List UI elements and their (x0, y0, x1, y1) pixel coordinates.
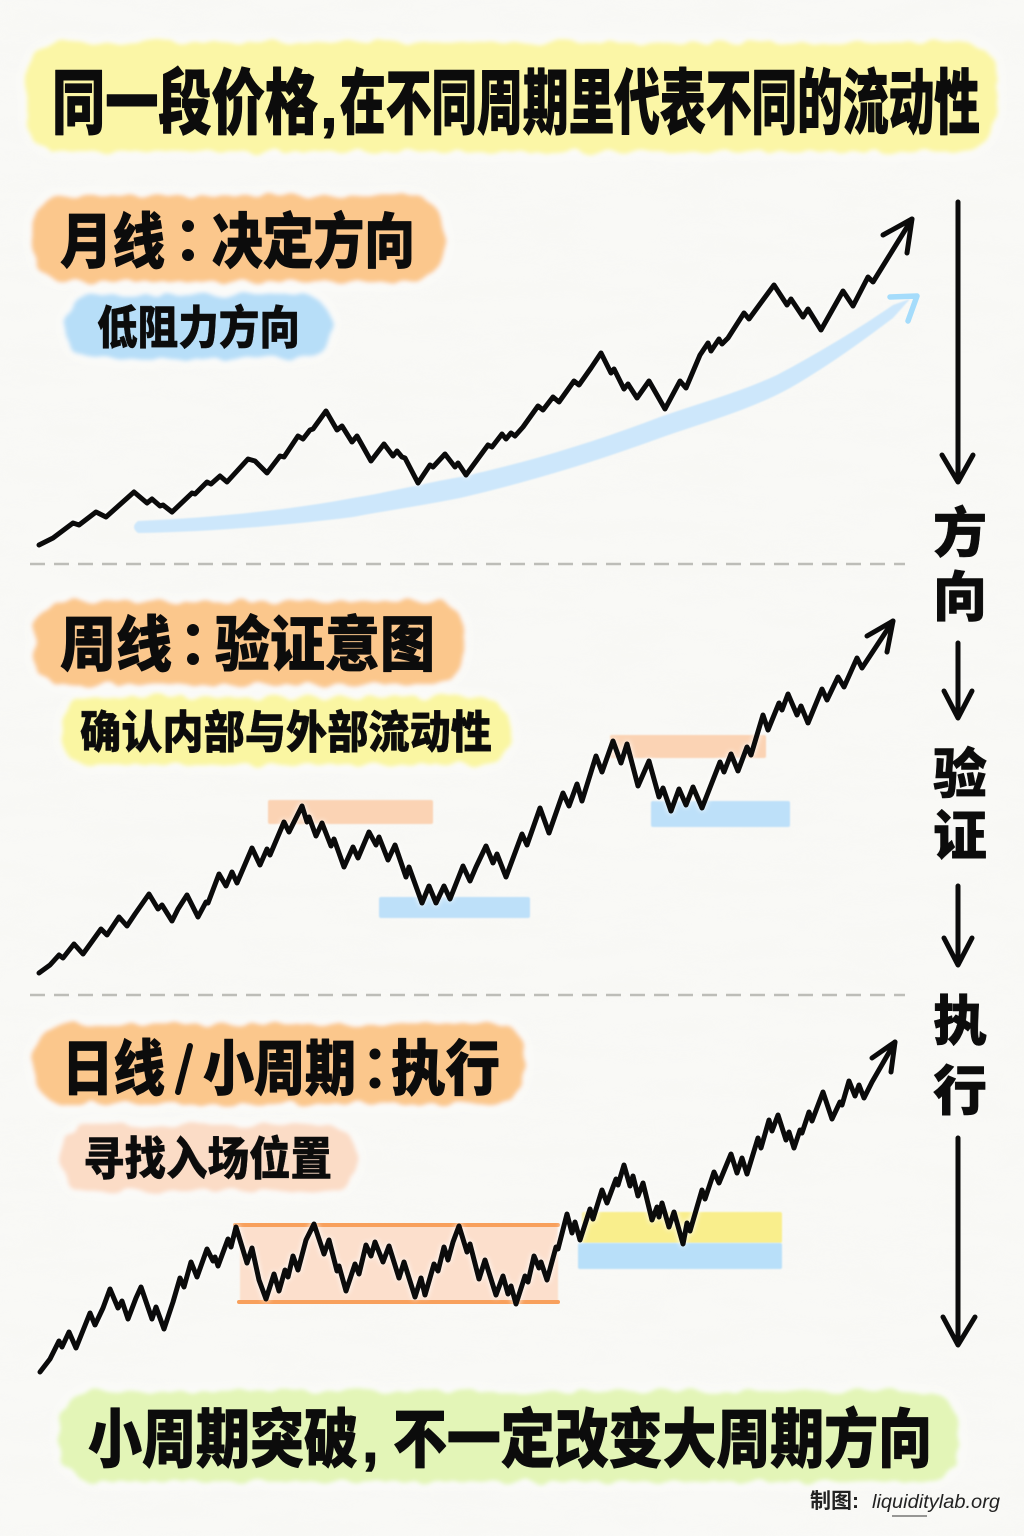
arrow head (872, 1042, 895, 1072)
arrow: down to verify (944, 643, 972, 718)
label: verify (933, 745, 987, 867)
zone: orange upper 2 (610, 735, 766, 758)
chart: monthly price line (39, 219, 917, 545)
label: direction: 方 (933, 503, 987, 564)
chart: weekly price line (39, 621, 893, 973)
zone: blue (578, 1243, 782, 1269)
heading: monthly decides direction (32, 195, 443, 282)
bottom takeaway banner (58, 1391, 960, 1482)
panel: weekly (34, 601, 893, 973)
chart: daily price line (40, 1042, 895, 1372)
panel: monthly (32, 195, 917, 545)
divider 1 (30, 563, 905, 565)
zone: range box (235, 1225, 558, 1303)
zone: blue lower 2 (651, 801, 790, 827)
price line (39, 219, 912, 545)
heading: daily and lower timeframe execution: 日线 (62, 1036, 165, 1103)
zone: yellow (582, 1212, 782, 1243)
label: verify: 验 (933, 745, 987, 805)
heading: monthly decides direction: 月线 (60, 209, 165, 276)
panel: daily (33, 1023, 895, 1372)
sublabel: find entry position: 寻找入场位置 (83, 1133, 332, 1185)
heading: monthly decides direction: 决定方向 (212, 209, 415, 276)
sublabel: confirm internal and external liquidity (62, 697, 511, 765)
arrow head (883, 219, 912, 253)
side column: direction verify execute flow (933, 202, 987, 1345)
label: direction: 向 (933, 568, 987, 628)
bottom takeaway banner: , (362, 1408, 379, 1475)
label: verify: 证 (933, 807, 987, 867)
heading: weekly verifies intent (34, 601, 464, 685)
arrow head (867, 621, 893, 652)
title banner: 同一段价格 (52, 65, 318, 144)
price line (40, 1042, 895, 1372)
credit (810, 1490, 1000, 1516)
heading: weekly verifies intent: 周线 (60, 612, 172, 679)
arrow: down to direction (942, 202, 973, 482)
bottom takeaway banner: 小周期突破 (88, 1404, 358, 1476)
divider 2 (30, 994, 905, 996)
sublabel: confirm internal and external liquidity: 确认内部与外部流动性 (80, 707, 492, 758)
heading: daily and lower timeframe execution: 执行 (391, 1036, 500, 1103)
label: execute: 行 (933, 1062, 987, 1122)
label: execute: 执 (933, 992, 987, 1052)
label: execute (933, 992, 987, 1122)
arrow: down to bottom (943, 1138, 975, 1345)
title banner (25, 42, 997, 152)
heading: daily and lower timeframe execution: 小周期 (203, 1036, 356, 1103)
heading: weekly verifies intent: 验证意图 (215, 612, 435, 679)
credit: liquiditylab.org (872, 1491, 1000, 1513)
arrow: blue low resistance curve (134, 296, 917, 533)
price line (39, 621, 893, 973)
label: direction (933, 503, 987, 628)
zone: blue lower 1 (379, 897, 530, 918)
zone: orange upper 1 (268, 800, 433, 824)
arrow: down to execute (944, 886, 972, 965)
bottom takeaway banner: 不一定改变大周期方向 (393, 1404, 932, 1476)
sublabel: low resistance direction: 低阻力方向 (97, 302, 300, 354)
title banner: , (320, 70, 338, 142)
credit: 制图: (810, 1490, 859, 1513)
heading: daily and lower timeframe execution (33, 1023, 526, 1104)
